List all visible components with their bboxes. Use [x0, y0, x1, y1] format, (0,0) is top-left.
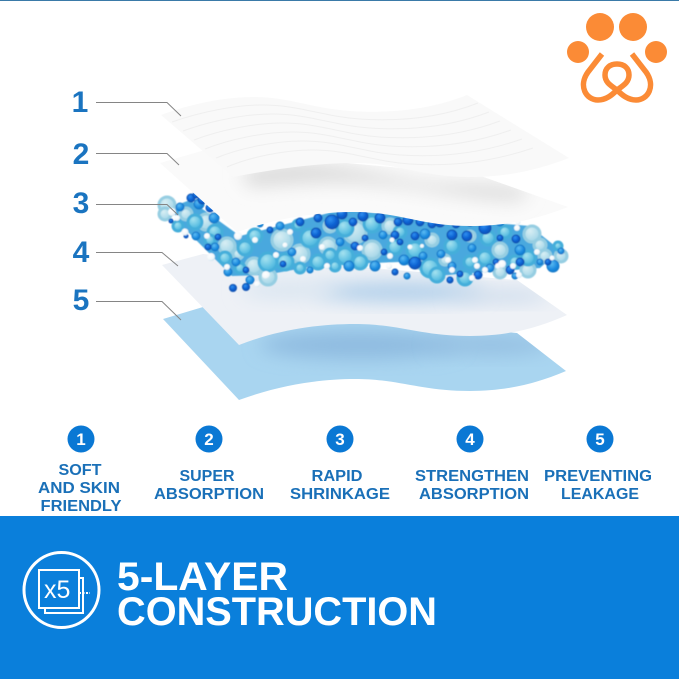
feature 2: super absorption — [154, 426, 264, 503]
layer 1: soft textured top sheet — [172, 102, 533, 174]
callout number 5: 5 — [73, 284, 89, 317]
callout number 5 — [73, 284, 181, 320]
icon: x5 layers badge — [24, 552, 99, 628]
feature 2: super absorption: 2 — [204, 430, 214, 449]
feature 3: rapid shrinkage: 3 — [335, 430, 345, 449]
callout number 4 — [73, 236, 178, 269]
feature 1: soft and skin friendly: 1 — [76, 430, 86, 449]
callout number 2: 2 — [73, 138, 89, 171]
feature 5: preventing leakage: PREVENTING — [544, 468, 652, 485]
feature 1: soft and skin friendly — [38, 426, 122, 515]
feature 4: strengthen absorption: STRENGTHEN — [415, 468, 529, 485]
layer 5: blue backsheet — [163, 307, 566, 400]
feature 3: rapid shrinkage — [290, 426, 390, 503]
feature 4: strengthen absorption: ABSORPTION — [419, 486, 529, 503]
feature 4: strengthen absorption: 4 — [465, 430, 475, 449]
callout number 4: 4 — [73, 236, 90, 269]
layer 3: absorbent beads — [159, 192, 567, 292]
title — [117, 555, 437, 634]
layer 4: reinforcing sheet — [162, 254, 566, 345]
feature 3: rapid shrinkage: SHRINKAGE — [290, 486, 390, 503]
callout number 3: 3 — [73, 187, 89, 220]
feature 1: soft and skin friendly: FRIENDLY — [40, 498, 122, 515]
feature 2: super absorption: SUPER — [180, 468, 235, 485]
title: 5-LAYER — [117, 555, 288, 599]
feature 5: preventing leakage: LEAKAGE — [561, 486, 639, 503]
feature 1: soft and skin friendly: SOFT — [58, 462, 102, 479]
callout number 1: 1 — [72, 86, 88, 119]
callout number 2 — [73, 138, 179, 171]
bottom banner — [0, 516, 679, 679]
icon: x5 layers badge: x5 — [44, 576, 70, 604]
callout number 3 — [73, 187, 178, 220]
feature 5: preventing leakage — [544, 426, 652, 503]
icon: orange paw logo — [567, 13, 667, 100]
feature 5: preventing leakage: 5 — [595, 430, 605, 449]
title: CONSTRUCTION — [117, 590, 437, 634]
feature 3: rapid shrinkage: RAPID — [312, 468, 362, 485]
feature 2: super absorption: ABSORPTION — [154, 486, 264, 503]
feature 1: soft and skin friendly: AND SKIN — [38, 480, 120, 497]
callout number 1 — [72, 86, 181, 119]
feature 4: strengthen absorption — [415, 426, 529, 503]
layer 2: absorbent paper — [192, 163, 532, 226]
